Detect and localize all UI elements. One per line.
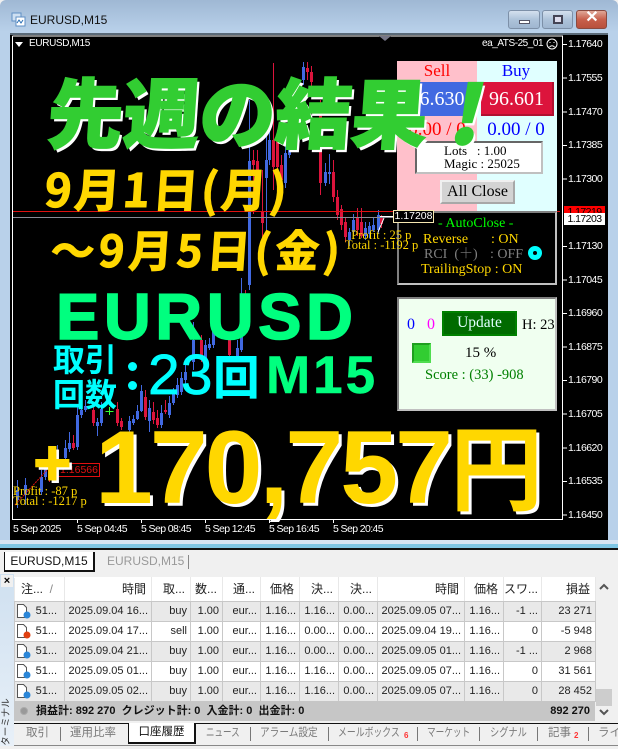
counter blue: 0 <box>407 316 415 333</box>
time axis: 5 Sep 12:45 <box>205 523 255 535</box>
history table: buy <box>169 665 187 677</box>
price axis: 1.16875 <box>568 341 602 353</box>
title: ! <box>442 52 498 168</box>
tab labels: 2 <box>574 731 578 740</box>
window frame <box>0 0 618 549</box>
profit total: 170,757円 <box>95 395 543 530</box>
history table: 0.00... <box>343 665 374 677</box>
update button <box>442 311 517 336</box>
history table: 0.00... <box>343 645 374 657</box>
history table: 通... <box>233 582 255 596</box>
candlesticks <box>18 62 382 508</box>
price axis: 1.16790 <box>568 374 602 386</box>
history table: -1 ... <box>516 645 538 657</box>
history table: buy <box>169 645 187 657</box>
history table: 時間 <box>122 582 146 596</box>
history table: eur... <box>233 665 257 677</box>
time axis: 5 Sep 20:45 <box>333 523 383 535</box>
chart tabs <box>0 552 618 574</box>
icon: window chart <box>12 12 26 26</box>
price axis: 1.17130 <box>568 240 602 252</box>
buy button: 96.601 <box>489 88 544 110</box>
history table: 1.16... <box>469 605 500 617</box>
rci row <box>424 247 523 262</box>
history table: eur... <box>233 605 257 617</box>
history table: 23 271 <box>558 605 592 617</box>
history table: 2025.09.05 01... <box>68 665 148 677</box>
scrollbar <box>596 577 612 722</box>
history table: 注... / <box>21 582 53 596</box>
close icon <box>1 575 13 587</box>
history table: 0.00... <box>343 625 374 637</box>
history table: 1.16... <box>469 685 500 697</box>
buy label: Buy <box>502 61 530 80</box>
sell button <box>400 82 474 116</box>
history table: 取... <box>163 582 185 596</box>
history table: 決... <box>311 582 333 596</box>
window buttons: ✕ <box>585 9 599 26</box>
rci row: RCI (＋) <box>424 247 478 262</box>
price axis: 1.16705 <box>568 408 602 420</box>
history table: スワ... <box>504 582 538 596</box>
history table: 51... <box>36 625 57 637</box>
history table: 1.00 <box>198 645 219 657</box>
active tab <box>128 723 196 744</box>
buy profit: 0.00 / 0 <box>487 119 545 140</box>
time axis: 5 Sep 04:45 <box>77 523 127 535</box>
history table: 1.16... <box>265 685 296 697</box>
tab labels: 取引 <box>26 727 49 739</box>
tab labels: マーケット <box>427 727 470 739</box>
chart symbol label: EURUSD,M15 <box>29 38 90 49</box>
history table <box>14 577 596 702</box>
panel: auto close: : ON <box>491 232 519 247</box>
history table: 0.00... <box>343 685 374 697</box>
history table: buy <box>169 605 187 617</box>
history table: 2025.09.04 16... <box>68 605 148 617</box>
sell profit: 0.00 / 0 <box>408 119 466 140</box>
auto close title: - AutoClose - <box>438 216 513 231</box>
green square <box>412 343 431 363</box>
history table: 0.00... <box>343 605 374 617</box>
history table: -1 ... <box>516 605 538 617</box>
history table: 2025.09.04 21... <box>68 645 148 657</box>
price axis: 1.17640 <box>568 38 602 50</box>
score: Score : (33) -908 <box>425 367 524 383</box>
history table: 1.16... <box>265 625 296 637</box>
entry price tag <box>50 463 100 477</box>
history table: 価格 <box>270 582 294 596</box>
trailing stop row: TrailingStop : ON <box>421 262 522 277</box>
expert advisor label: ea_ATS-25_01 <box>482 38 543 49</box>
trade count label <box>53 335 117 416</box>
history table: 51... <box>36 605 57 617</box>
price axis: 1.17045 <box>568 274 602 286</box>
all close button <box>440 180 515 204</box>
close icon: × <box>4 575 10 587</box>
all close button: All Close <box>447 183 508 200</box>
history table: 1.00 <box>198 665 219 677</box>
history table: 1.16... <box>469 645 500 657</box>
history table: 51... <box>36 685 57 697</box>
entry price tag: 1.16566 <box>60 464 98 476</box>
history table: 2025.09.05 07... <box>381 685 461 697</box>
history table: 1.16... <box>304 665 335 677</box>
tab labels <box>26 726 618 741</box>
window buttons <box>508 9 607 29</box>
history table: 0 <box>532 685 538 697</box>
date start: 9月1日(月) <box>43 155 292 221</box>
history table: 1.16... <box>469 625 500 637</box>
panel: update <box>397 297 557 411</box>
trade count colons <box>128 362 137 390</box>
history table: 1.16... <box>469 665 500 677</box>
history table: 損益 <box>566 582 590 596</box>
history table: 価格 <box>474 582 498 596</box>
history table: 0.00... <box>304 625 335 637</box>
price axis: 1.16450 <box>568 509 602 521</box>
history table: 2025.09.05 07... <box>381 665 461 677</box>
time axis <box>13 523 384 535</box>
history table: 2025.09.04 19... <box>381 625 461 637</box>
terminal side strip <box>0 574 14 746</box>
history table: 時間 <box>435 582 459 596</box>
price axis: 1.16535 <box>568 475 602 487</box>
price axis: 1.17555 <box>568 72 602 84</box>
history table: 1.16... <box>304 685 335 697</box>
profit readout left: Profit : -87 p <box>13 484 77 498</box>
panel: sell buy <box>397 61 557 211</box>
history table: eur... <box>233 685 257 697</box>
tab labels: アラーム設定 <box>260 727 318 739</box>
trade count label: 回数 <box>53 370 117 416</box>
hour label: H: 23 <box>522 317 555 333</box>
tab labels: 6 <box>404 731 408 740</box>
active tab: 口座履歴 <box>138 726 184 738</box>
history table: eur... <box>233 625 257 637</box>
history table: eur... <box>233 645 257 657</box>
totals row: 損益計: 892 270 クレジット計: 0 入金計: 0 出金計: 0 <box>36 705 304 717</box>
time axis: 5 Sep 08:45 <box>141 523 191 535</box>
tab labels: 運用比率 <box>70 727 116 739</box>
history table: 51... <box>36 665 57 677</box>
profit readout right: Total : -1192 p <box>345 238 418 252</box>
reverse row: Reverse <box>423 232 468 247</box>
time axis: 5 Sep 16:45 <box>269 523 319 535</box>
history table: 1.00 <box>198 625 219 637</box>
price axis: 1.17385 <box>568 139 602 151</box>
update button: Update <box>457 314 502 331</box>
status ring <box>528 246 542 260</box>
totals row: 892 270 <box>550 705 590 717</box>
date end: ～9月5日(金) <box>49 216 346 280</box>
history table: 1.16... <box>304 605 335 617</box>
profit readout left: Total : -1217 p <box>13 494 87 508</box>
bottom tabs <box>14 723 618 746</box>
history table: 1.16... <box>265 645 296 657</box>
tab labels: 記事 <box>548 727 571 739</box>
totals row <box>14 701 595 721</box>
history table: 51... <box>36 645 57 657</box>
row order icons <box>17 604 30 698</box>
lots box <box>415 141 543 174</box>
history table: 数... <box>195 582 217 596</box>
window bottom edge <box>0 540 618 552</box>
history table: 2025.09.05 01... <box>381 645 461 657</box>
active chart tab: EURUSD,M15 <box>10 554 88 568</box>
history table: 1.00 <box>198 685 219 697</box>
price tag: bid: 1.17203 <box>567 213 602 225</box>
history table: 決... <box>350 582 372 596</box>
title: 先週の結果 <box>44 54 432 164</box>
history table: sell <box>170 625 187 637</box>
symbol: EURUSD <box>56 280 357 353</box>
sell button: 96.630 <box>410 88 464 110</box>
trade count label: 取引 <box>53 335 117 381</box>
vertical label: ターミナル <box>1 698 12 746</box>
history table: buy <box>169 685 187 697</box>
history table: 2025.09.04 17... <box>68 625 148 637</box>
chart frame and lines <box>12 36 567 523</box>
trade count value: 23回 <box>148 342 260 408</box>
price axis: 1.17300 <box>568 173 602 185</box>
plus sign: + <box>33 425 72 499</box>
active chart tab <box>4 552 95 572</box>
history table: 1.16... <box>265 605 296 617</box>
panel: auto close <box>397 211 557 285</box>
counter magenta: 0 <box>427 316 435 333</box>
history table: 2025.09.05 07... <box>381 605 461 617</box>
tab labels: ニュース <box>206 727 240 739</box>
profit readout left <box>13 484 87 508</box>
sell label: Sell <box>424 61 450 80</box>
panel: auto close: : OFF <box>490 247 523 262</box>
current trade tag: 1.17208 <box>395 210 432 222</box>
history table: 28 452 <box>558 685 592 697</box>
history table: 1.16... <box>265 665 296 677</box>
history table: 0.00... <box>304 645 335 657</box>
time axis: 5 Sep 2025 <box>13 523 61 535</box>
buy button <box>481 82 554 116</box>
tab labels: メールボックス <box>338 727 400 739</box>
history table: 2025.09.05 02... <box>68 685 148 697</box>
timeframe: M15 <box>266 346 378 405</box>
price axis: 1.17470 <box>568 106 602 118</box>
inactive chart tab: EURUSD,M15 <box>107 554 184 568</box>
history table: 31 561 <box>558 665 592 677</box>
tab labels: シグナル <box>490 727 527 739</box>
history table: -5 948 <box>561 625 592 637</box>
history table: 0 <box>532 665 538 677</box>
price axis <box>564 38 605 521</box>
window title: EURUSD,M15 <box>30 13 107 27</box>
history table: 0 <box>532 625 538 637</box>
profit readout right: Profit : 25 p <box>351 228 411 242</box>
percent: 15 % <box>465 345 496 361</box>
price axis: 1.16620 <box>568 442 602 454</box>
chart background <box>10 33 608 542</box>
reverse row <box>423 232 519 247</box>
history table: 1.00 <box>198 605 219 617</box>
price axis: 1.16960 <box>568 307 602 319</box>
lots box: Lots : 1.00 Magic : 25025 <box>444 143 520 171</box>
profit readout right <box>345 228 418 252</box>
history table: 2 968 <box>564 645 592 657</box>
